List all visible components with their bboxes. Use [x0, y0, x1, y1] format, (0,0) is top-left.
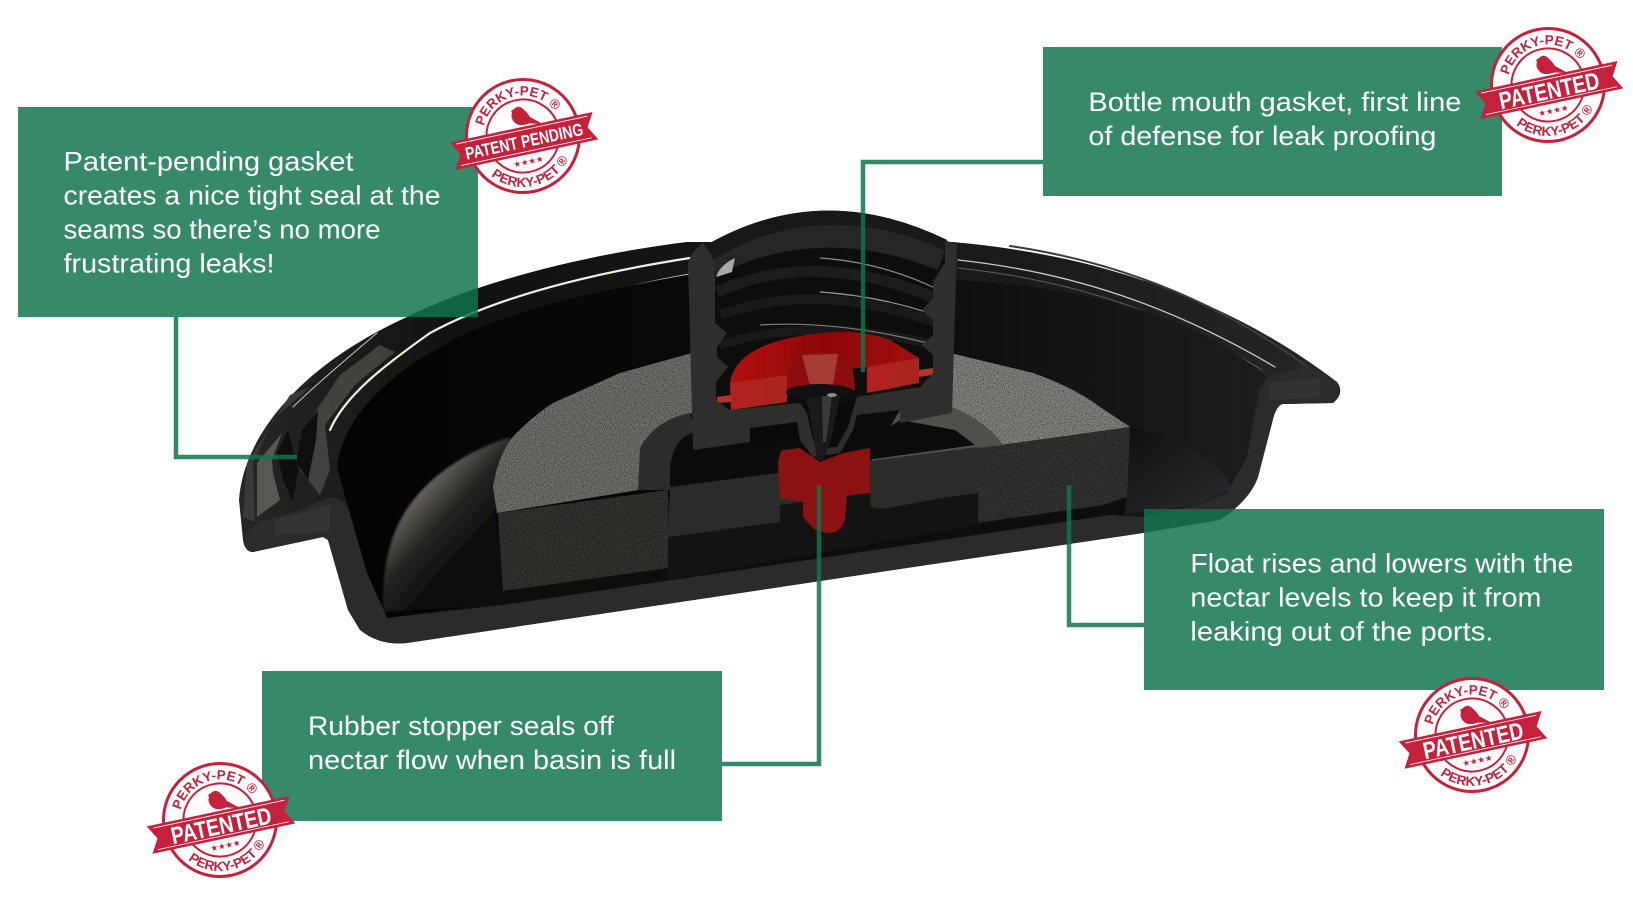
rubber valve pin [786, 384, 854, 460]
centre arch section [638, 413, 695, 490]
badge: patent pending: PERKY-PET ® [475, 86, 560, 126]
flange notches right [1270, 378, 1320, 400]
red gasket dome highlight [802, 354, 838, 386]
leader line: rubber stopper [722, 485, 819, 764]
badge: patented, rubber stopper: PERKY-PET ® [172, 770, 257, 810]
neck inner light patch [716, 258, 735, 277]
neck rim band [703, 211, 947, 260]
foam cut face left [498, 490, 668, 591]
badge: patent pending: ★★★★ [513, 154, 545, 170]
callout: bottle mouth gasket: of defense for leak proofing [1088, 121, 1436, 151]
leader line: float [1069, 485, 1144, 625]
callout: bottle mouth gasket: Bottle mouth gasket, first line [1088, 87, 1461, 117]
dark bed under float [497, 430, 1130, 605]
badge: patented, rubber stopper [146, 762, 296, 878]
callout: float: Float rises and lowers with the [1190, 548, 1573, 578]
floor right [1110, 427, 1232, 515]
red gasket dome [787, 352, 855, 392]
badge: patented, rubber stopper: PATENTED [169, 803, 274, 850]
basin cutaway illustration [239, 211, 1340, 643]
callout: patent-pending gasket: frustrating leaks! [64, 249, 274, 279]
badge: patented, float: PERKY-PET ® [1440, 755, 1516, 786]
badge: patented, bottle mouth gasket [1474, 27, 1624, 143]
cavity under neck [670, 420, 975, 488]
foam top right [950, 353, 1130, 445]
badge: patented, bottle mouth gasket: PERKY-PET ® [1516, 105, 1592, 136]
badge: patent pending [450, 78, 598, 194]
badge: patented, rubber stopper: PERKY-PET ® [188, 840, 264, 872]
badge: patented, rubber stopper: ★★★★ [210, 838, 242, 854]
floor sheen left [383, 437, 510, 612]
centre disk surface right [870, 407, 1003, 462]
leader line: seam gasket [176, 317, 297, 457]
red gasket right face [867, 358, 919, 393]
callout: rubber stopper [262, 671, 722, 821]
red gasket small tabs [717, 368, 933, 403]
callout: rubber stopper: nectar flow when basin is full [308, 745, 676, 775]
neck threads [717, 258, 935, 345]
neck cross-section walls [688, 240, 957, 457]
callout: float [1144, 509, 1604, 690]
badge: patent pending: PERKY-PET ® [492, 156, 567, 188]
flange notches left [275, 505, 330, 535]
leader line: bottle mouth gasket [863, 162, 1043, 372]
callout: bottle mouth gasket [1043, 47, 1502, 196]
basin cross-section wall and floor [243, 367, 1340, 643]
callout: patent-pending gasket: Patent-pending gasket [64, 147, 354, 177]
callout: float: nectar levels to keep it from [1190, 582, 1541, 612]
red gasket top surface [730, 332, 919, 383]
callout: rubber stopper: Rubber stopper seals off [308, 711, 615, 741]
foam cut face right [977, 427, 1130, 523]
neck rim inner band [712, 225, 945, 275]
badge: patented, float: PATENTED [1421, 718, 1526, 765]
badge: patented, bottle mouth gasket: PATENTED [1497, 68, 1602, 115]
badge: patented, float: ★★★★ [1462, 753, 1494, 769]
badge: patented, bottle mouth gasket: ★★★★ [1538, 103, 1570, 119]
rim highlights [293, 246, 1318, 463]
red gasket left face [730, 375, 787, 410]
left rim facets [243, 345, 395, 522]
callout: patent-pending gasket: seams so there’s no more [64, 215, 380, 245]
badge: patented, float [1398, 677, 1548, 793]
centre slab section [668, 447, 978, 537]
bowl interior [337, 275, 1267, 618]
badge: patented, float: PERKY-PET ® [1424, 685, 1509, 724]
callout: patent-pending gasket [18, 107, 478, 317]
foam top left [493, 353, 692, 513]
red rubber stopper [778, 448, 870, 533]
dark area below centre slab [668, 470, 978, 580]
callout: float: leaking out of the ports. [1190, 616, 1493, 646]
callout: patent-pending gasket: creates a nice tight seal at the [64, 181, 441, 211]
neck interior [703, 211, 947, 410]
basin outer shell [239, 242, 1340, 643]
badge: patented, bottle mouth gasket: PERKY-PET ® [1500, 35, 1585, 74]
badge: patent pending: PATENT PENDING [463, 119, 585, 164]
